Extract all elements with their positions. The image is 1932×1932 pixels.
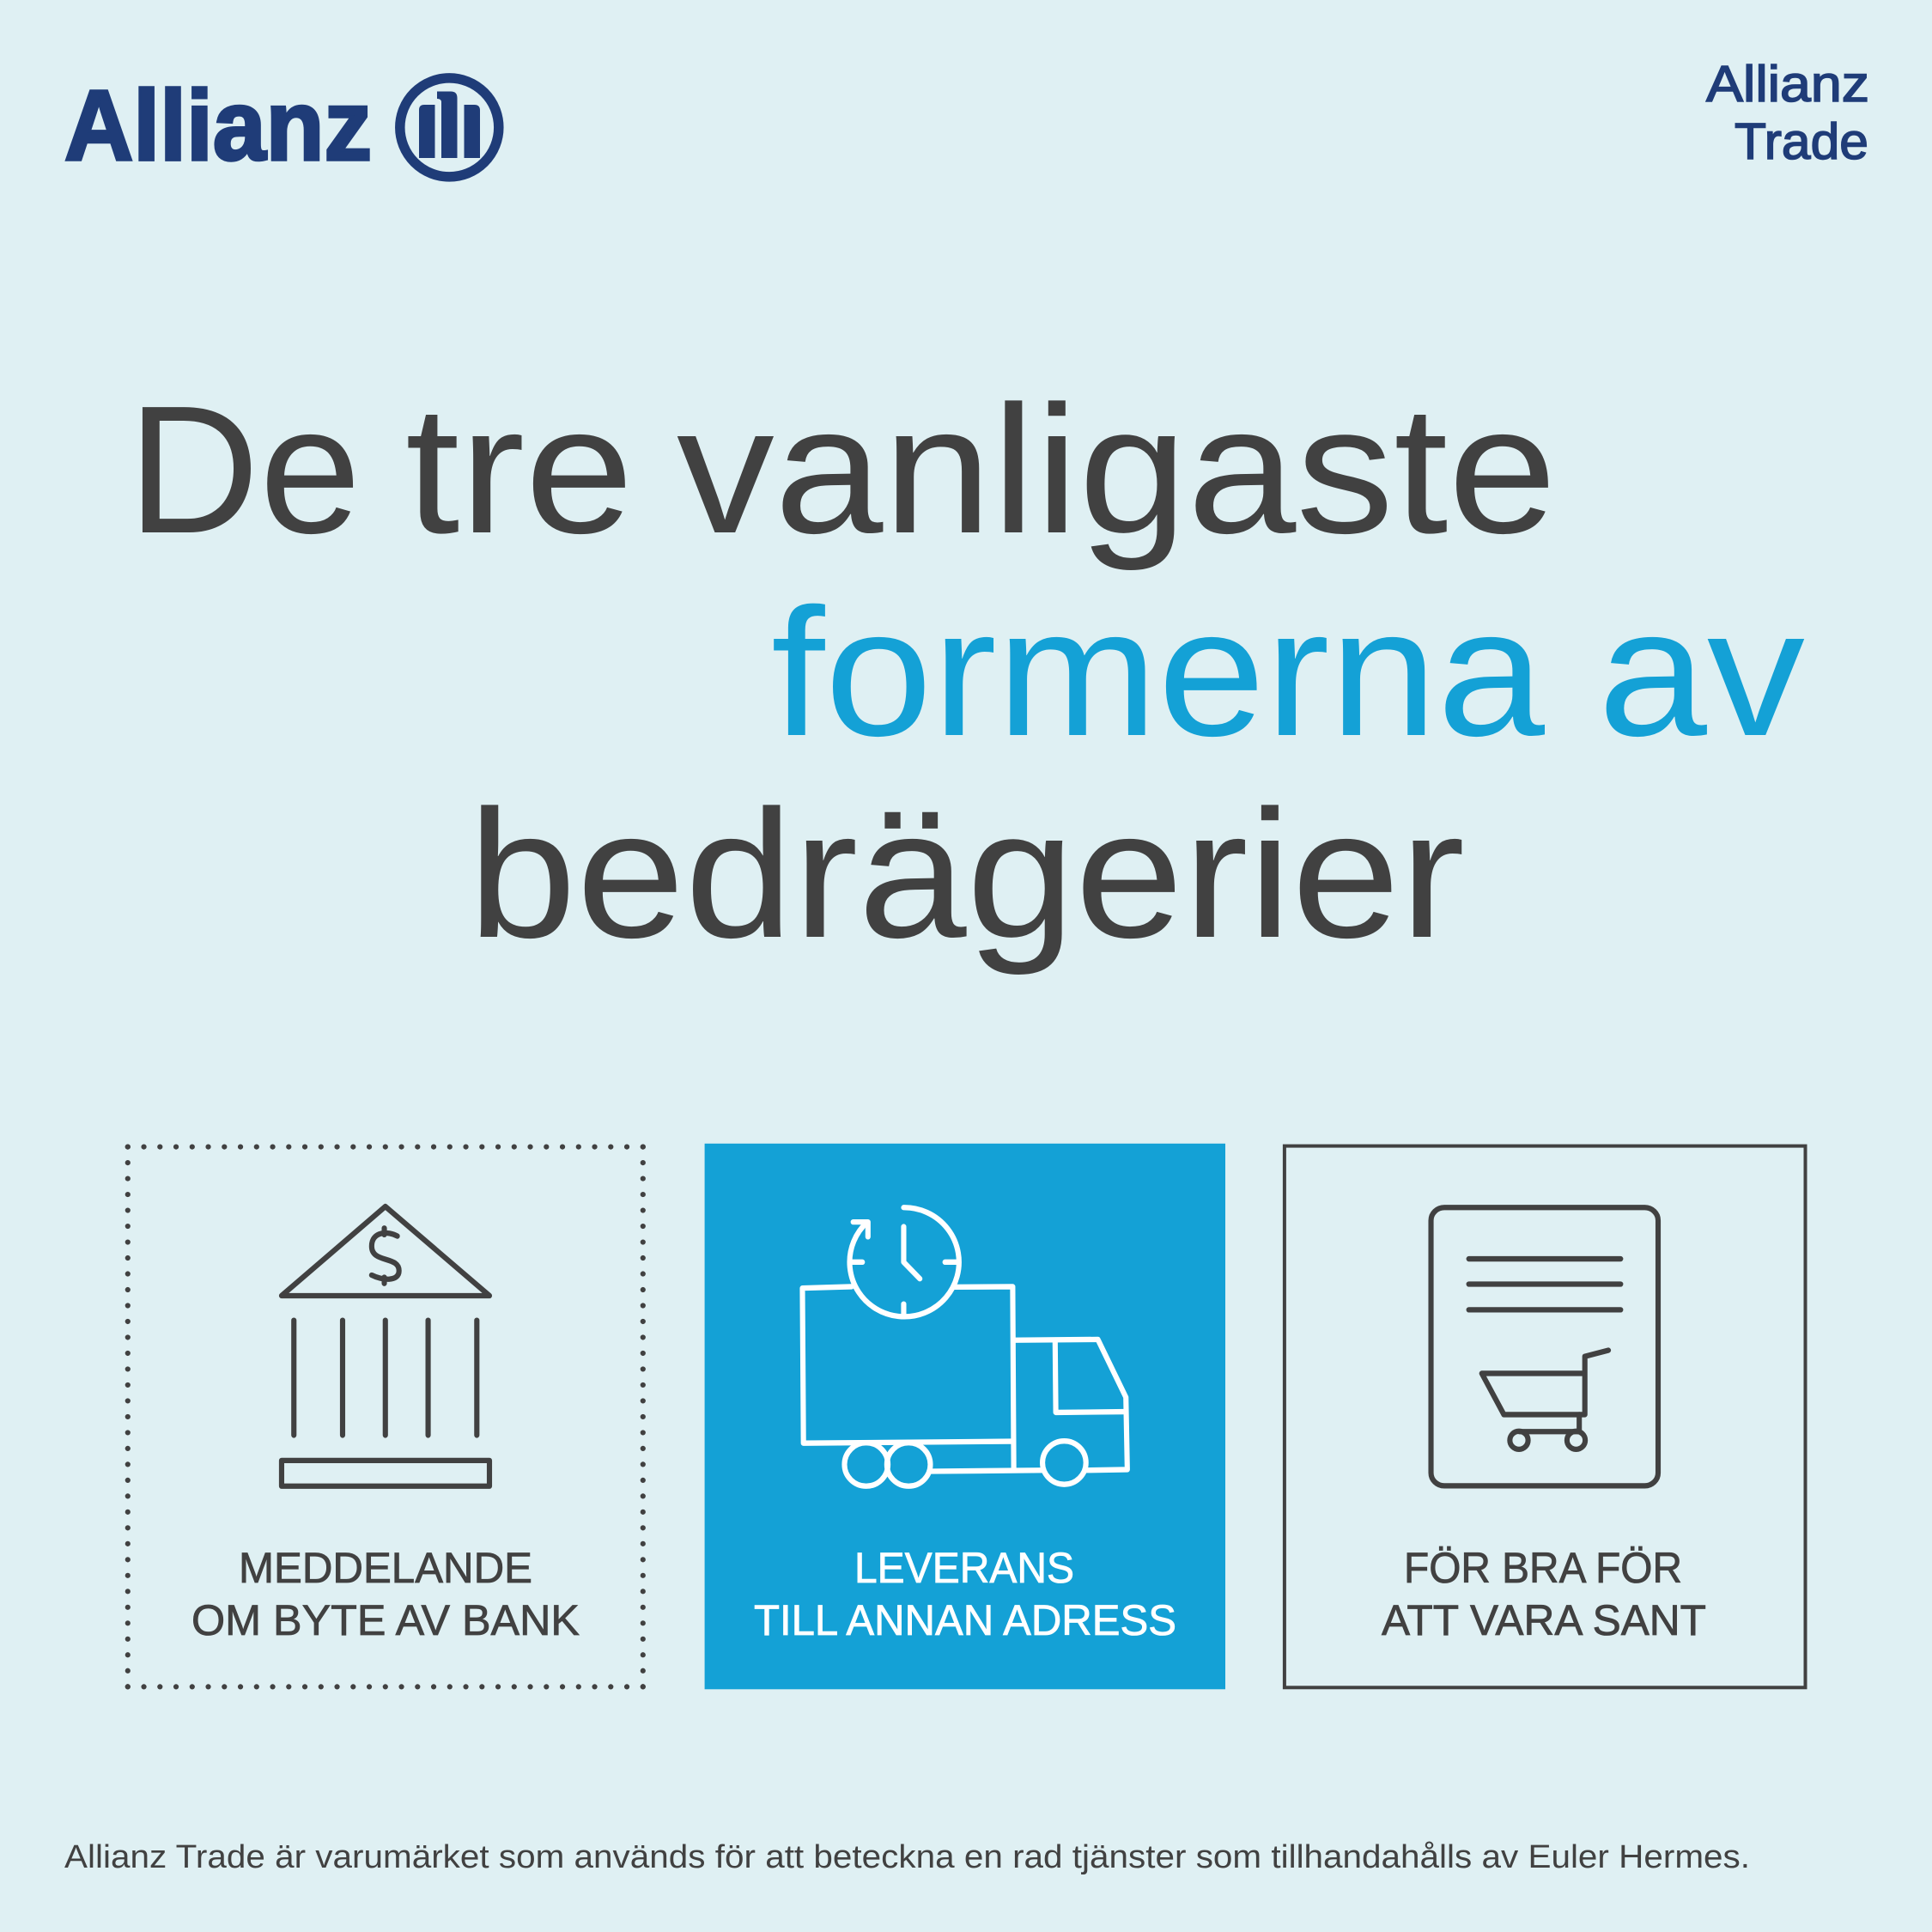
panel: bank change notice — [128, 1147, 643, 1686]
label: delivery to another address: LEVERANS — [854, 1544, 1074, 1592]
brand name: Allianz Trade — [1706, 56, 1869, 170]
icon: document with shopping cart — [1431, 1207, 1658, 1485]
logo: Allianz wordmark and emblem — [64, 70, 499, 181]
label: delivery to another address — [754, 1544, 1176, 1644]
title line 2, highlighted: av — [1598, 570, 1805, 774]
title — [127, 368, 1805, 975]
brand line 2: Trade — [1735, 113, 1868, 170]
label: too good to be true — [1382, 1544, 1706, 1644]
footer note: Allianz Trade är varumärket som används för att beteckna en rad tjänster som tillhandahålls av Euler Hermes. — [64, 1839, 1750, 1875]
label: bank change notice — [191, 1544, 580, 1644]
panel: too good to be true — [1285, 1146, 1805, 1687]
title line 1: vanligaste — [677, 368, 1557, 571]
label: too good to be true: ATT VARA SANT — [1382, 1596, 1706, 1644]
label: delivery to another address: TILL ANNAN ADRESS — [754, 1596, 1176, 1644]
label: too good to be true: FÖR BRA FÖR — [1404, 1544, 1682, 1592]
title line 1: De — [127, 368, 361, 571]
label: bank change notice: MEDDELANDE — [239, 1544, 532, 1592]
label: bank change notice: OM BYTE AV BANK — [191, 1596, 580, 1644]
panel: delivery to another address — [705, 1144, 1225, 1689]
icon: bank building with dollar sign — [282, 1206, 489, 1486]
title line 2, highlighted: formerna — [771, 570, 1545, 774]
brand line 1: Allianz — [1706, 56, 1869, 112]
logo emblem — [400, 78, 499, 177]
icon: delivery truck with clock — [802, 1207, 1127, 1486]
title line 1: tre — [405, 368, 634, 571]
title line 1 — [127, 368, 1557, 571]
logo wordmark: Allianz — [64, 70, 372, 181]
title line 3: bedrägerier — [468, 772, 1465, 975]
